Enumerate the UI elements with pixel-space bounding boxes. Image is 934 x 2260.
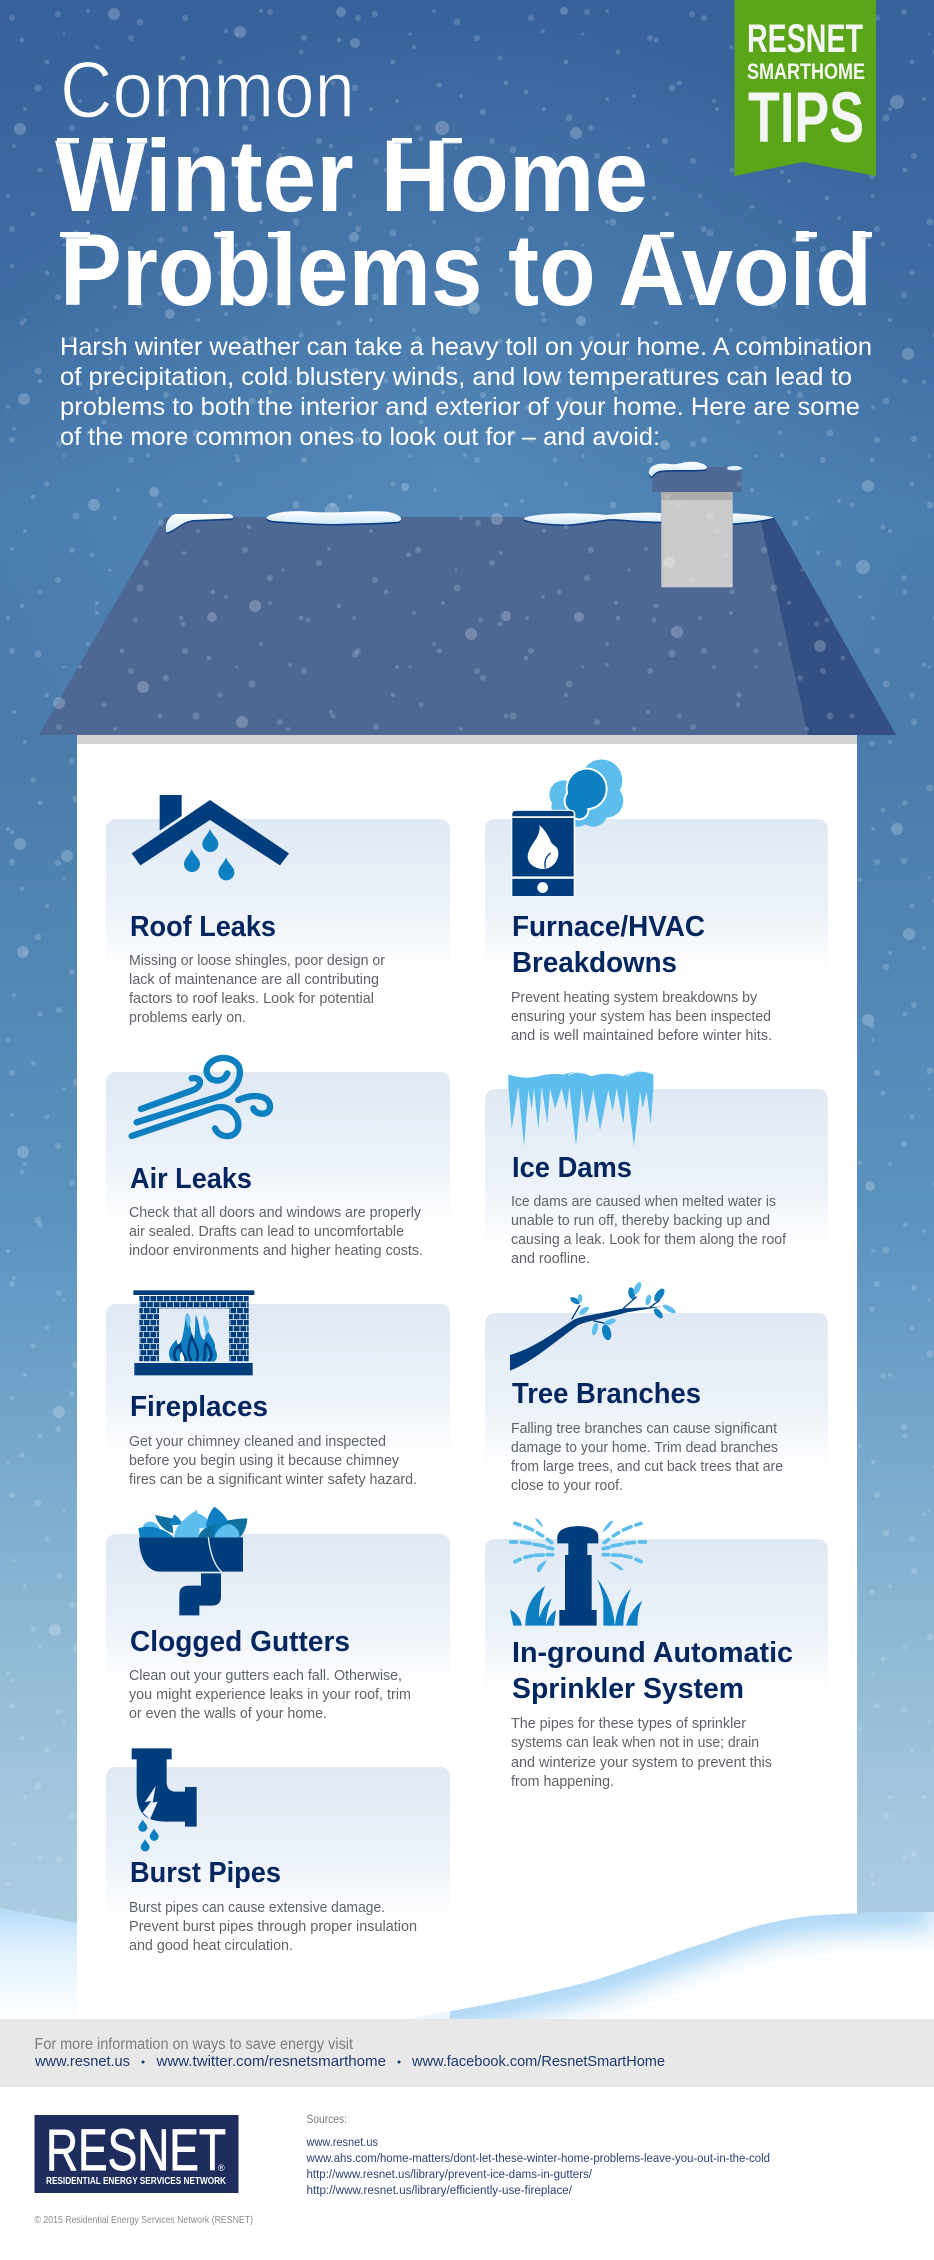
panel: in-ground automatic sprinkler system: The pipes for these types of sprinkler xyxy=(511,1716,746,1732)
ribbon: RESNET SmartHome Tips: TIPS xyxy=(748,79,864,158)
panel: in-ground automatic sprinkler system: from happening. xyxy=(511,1774,614,1790)
panel: roof leaks xyxy=(106,795,450,1026)
roof snow xyxy=(166,462,774,534)
panel: roof leaks: Missing or loose shingles, poor design or xyxy=(129,953,385,969)
sources: http://www.resnet.us/library/efficiently-use-fireplace/ xyxy=(306,2185,573,2197)
icon: gutter with leaves xyxy=(138,1507,247,1615)
panel: air leaks: Check that all doors and windows are properly xyxy=(129,1205,422,1221)
panel: furnace/HVAC breakdowns: Breakdowns xyxy=(512,947,677,979)
panel: tree branches: Falling tree branches can cause significant xyxy=(511,1421,777,1437)
icon: fireplace xyxy=(133,1290,254,1375)
sources: Sources: xyxy=(306,2114,347,2126)
panel: ice dams: Ice Dams xyxy=(512,1152,632,1184)
footer band: more information links: www.facebook.com/ResnetSmartHome xyxy=(411,2053,665,2070)
panel: burst pipes xyxy=(106,1748,450,2020)
house wall xyxy=(77,735,857,2025)
panel: tree branches: close to your roof. xyxy=(511,1478,623,1494)
sources: http://www.resnet.us/library/prevent-ice-dams-in-gutters/ xyxy=(306,2169,593,2181)
icon: burst pipe xyxy=(132,1748,197,1852)
RESNET logo: ® xyxy=(218,2163,225,2173)
title: Common xyxy=(60,45,355,134)
footer band: more information links: www.twitter.com/resnetsmarthome xyxy=(155,2053,386,2070)
panel: roof leaks: problems early on. xyxy=(129,1010,246,1026)
panel: air leaks: air sealed. Drafts can lead to uncomfortable xyxy=(129,1224,404,1240)
panel: roof leaks: factors to roof leaks. Look for potential xyxy=(129,991,374,1007)
panel: tree branches: damage to your home. Trim dead branches xyxy=(511,1440,778,1456)
panel: clogged gutters xyxy=(106,1507,450,1722)
footer band: more information links: www.resnet.us xyxy=(34,2053,130,2070)
RESNET logo xyxy=(34,2115,238,2193)
panel: tree branches: from large trees, and cut back trees that are xyxy=(511,1459,783,1475)
panel: burst pipes: Prevent burst pipes through proper insulation xyxy=(129,1919,417,1935)
house roof xyxy=(39,517,896,735)
icon: sprinkler xyxy=(510,1519,645,1626)
panel: fireplaces: Fireplaces xyxy=(130,1391,268,1423)
intro text: of precipitation, cold blustery winds, and low temperatures can lead to xyxy=(60,363,852,391)
icon: tree branch xyxy=(510,1281,677,1371)
intro text: of the more common ones to look out for – and avoid: xyxy=(60,423,660,451)
sources: www.resnet.us xyxy=(306,2137,378,2149)
panel: roof leaks: lack of maintenance are all contributing xyxy=(129,972,379,988)
panel: furnace/HVAC breakdowns xyxy=(485,759,828,1044)
panel: ice dams: Ice dams are caused when melted water is xyxy=(511,1194,776,1210)
panel: in-ground automatic sprinkler system: systems can leak when not in use; drain xyxy=(511,1735,759,1751)
panel: ice dams xyxy=(485,1071,828,1267)
panel: fireplaces: before you begin using it because chimney xyxy=(129,1453,400,1469)
chimney xyxy=(652,467,742,587)
panel: burst pipes: Burst Pipes xyxy=(130,1857,281,1889)
panel: fireplaces xyxy=(106,1290,450,1488)
icon: icicles xyxy=(508,1071,653,1146)
icon: leaking roof xyxy=(132,795,289,880)
panel: clogged gutters: you might experience leaks in your roof, trim xyxy=(129,1687,411,1703)
ribbon: RESNET SmartHome Tips: SMARTHOME xyxy=(747,59,865,84)
panel: roof leaks: Roof Leaks xyxy=(130,911,276,943)
intro text: problems to both the interior and exterior of your home. Here are some xyxy=(60,393,860,421)
footer band: more information links xyxy=(0,2019,934,2087)
panel: fireplaces: fires can be a significant winter safety hazard. xyxy=(129,1472,417,1488)
panel: in-ground automatic sprinkler system xyxy=(485,1519,828,1790)
panel: ice dams: unable to run off, thereby backing up and xyxy=(511,1213,770,1229)
panel: clogged gutters: Clogged Gutters xyxy=(130,1626,350,1658)
panel: furnace/HVAC breakdowns: Prevent heating system breakdowns by xyxy=(511,990,758,1006)
panel: fireplaces: Get your chimney cleaned and inspected xyxy=(129,1434,386,1450)
panel: tree branches: Tree Branches xyxy=(512,1378,701,1410)
panel: burst pipes: Burst pipes can cause extensive damage. xyxy=(129,1900,385,1916)
panel: furnace/HVAC breakdowns: Furnace/HVAC xyxy=(512,911,705,943)
panel: air leaks xyxy=(106,1058,450,1259)
RESNET logo: RESIDENTIAL ENERGY SERVICES NETWORK xyxy=(46,2175,226,2187)
sources xyxy=(306,2114,770,2197)
panel: furnace/HVAC breakdowns: and is well maintained before winter hits. xyxy=(511,1028,772,1044)
panel: in-ground automatic sprinkler system: and winterize your system to prevent this xyxy=(511,1755,772,1771)
title xyxy=(55,45,872,327)
panel: in-ground automatic sprinkler system: Sprinkler System xyxy=(512,1673,744,1705)
panel: air leaks: indoor environments and higher heating costs. xyxy=(129,1243,423,1259)
title: Problems to Avoid xyxy=(60,213,872,327)
ribbon: RESNET SmartHome Tips xyxy=(734,0,876,176)
snow drifts xyxy=(0,1908,934,2019)
panel: air leaks: Air Leaks xyxy=(130,1163,252,1195)
intro text xyxy=(60,333,872,451)
footer band: more information links: For more information on ways to save energy visit xyxy=(34,2036,354,2053)
RESNET logo: RESNET xyxy=(46,2118,226,2183)
sources: www.ahs.com/home-matters/dont-let-these-winter-home-problems-leave-you-out-in-the-cold xyxy=(306,2153,770,2165)
intro text: Harsh winter weather can take a heavy toll on your home. A combination xyxy=(60,333,872,361)
panel: clogged gutters: or even the walls of your home. xyxy=(129,1706,327,1722)
panel: clogged gutters: Clean out your gutters each fall. Otherwise, xyxy=(129,1668,402,1684)
icon: furnace xyxy=(511,759,623,897)
panel: burst pipes: and good heat circulation. xyxy=(129,1938,293,1954)
copyright: © 2015 Residential Energy Services Network (RESNET) xyxy=(34,2215,253,2226)
icon: wind xyxy=(132,1058,270,1136)
panel: in-ground automatic sprinkler system: In-ground Automatic xyxy=(512,1637,793,1669)
title: Winter Home xyxy=(55,119,648,233)
ribbon: RESNET SmartHome Tips: RESNET xyxy=(747,17,863,61)
panel: ice dams: and roofline. xyxy=(511,1251,590,1267)
panel: ice dams: causing a leak. Look for them along the roof xyxy=(511,1232,787,1248)
panel: tree branches xyxy=(485,1281,828,1494)
panel: furnace/HVAC breakdowns: ensuring your system has been inspected xyxy=(511,1009,771,1025)
